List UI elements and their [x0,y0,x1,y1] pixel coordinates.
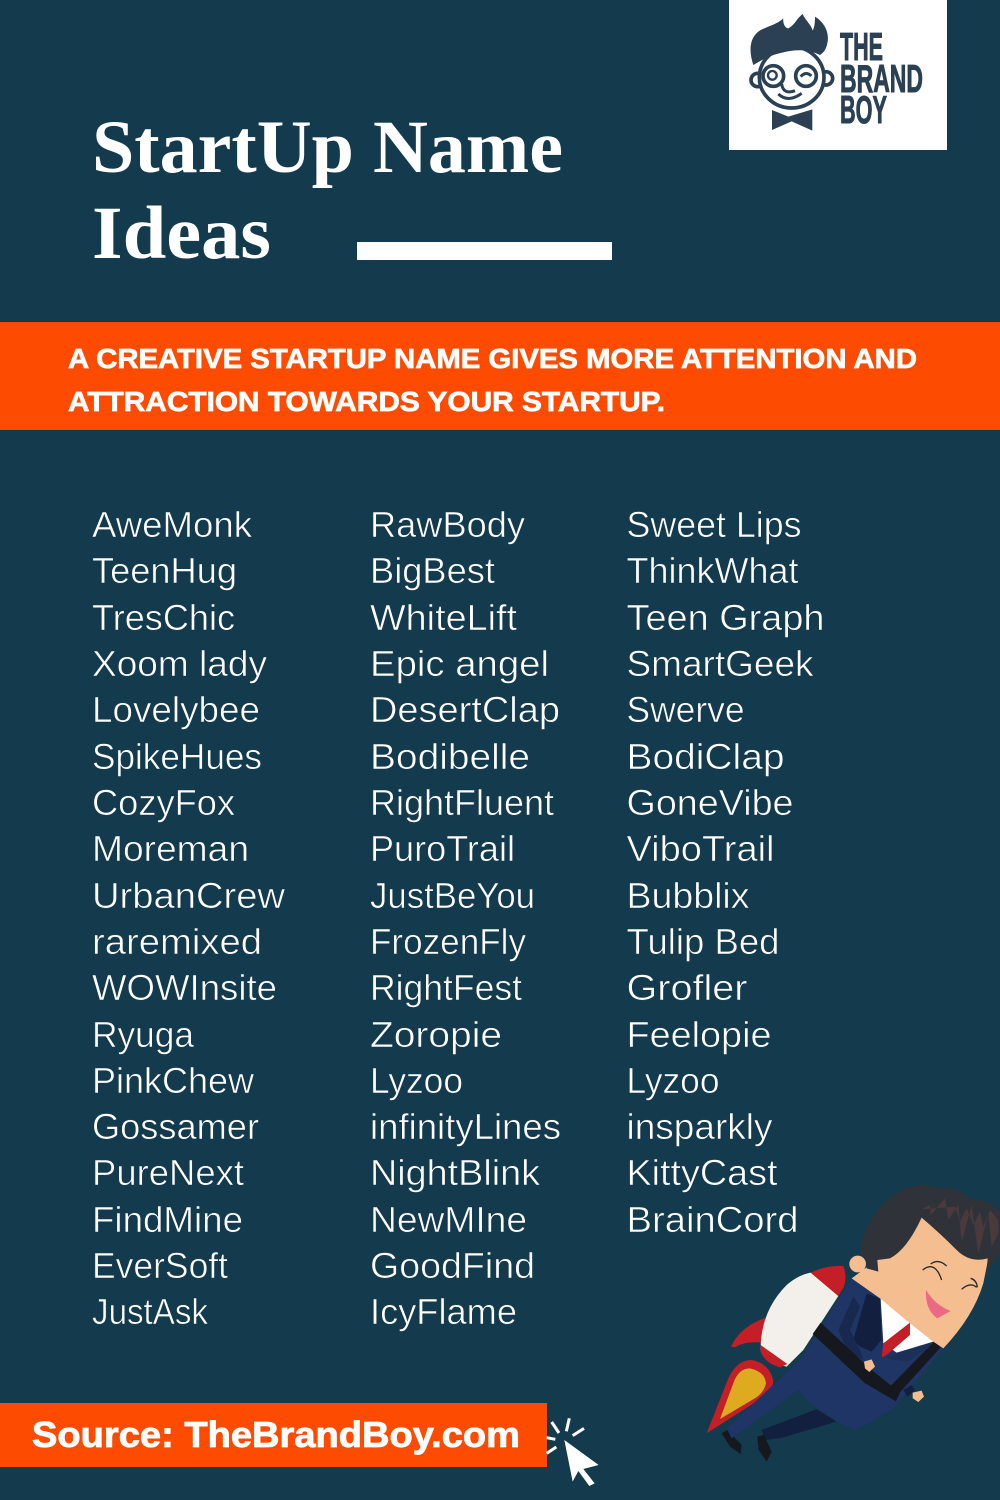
name list column 1: Ryuga [92,1014,195,1055]
name list column 2: NightBlink [370,1152,541,1193]
orange banner: ATTRACTION TOWARDS YOUR STARTUP. [68,386,665,417]
source bar [0,1403,547,1467]
name list column 3 [626,504,824,1240]
logo panel [729,0,947,150]
name list column 2: Lyzoo [370,1060,463,1101]
shirt and tie [881,1298,935,1362]
logo wordmark: BRAND [840,58,923,101]
title: Ideas [92,192,271,275]
name list column 2: DesertClap [370,689,560,730]
name list column 3: GoneVibe [626,782,794,823]
name list column 3: Feelopie [626,1014,772,1055]
name list column 2: WhiteLift [370,597,517,638]
name list column 1 [92,504,286,1332]
face: eyes and mouth [923,1262,977,1318]
name list column 3: ViboTrail [626,828,774,869]
back leg [762,1409,837,1440]
suit [727,1278,943,1438]
name list column 1: FindMine [92,1199,243,1240]
name list column 2: FrozenFly [370,921,526,962]
name list column 3: SmartGeek [626,643,815,684]
name list column 1: TeenHug [92,550,237,591]
harness strap [813,1323,941,1401]
name list column 3: Bubblix [626,875,750,916]
name list column 2: infinityLines [370,1106,561,1147]
name list column 3: ThinkWhat [626,550,798,591]
name list column 1: Lovelybee [92,689,260,730]
name list column 3: Tulip Bed [626,921,780,962]
name list column 1: Moreman [92,828,249,869]
name list column 1: TresChic [92,597,235,638]
dark lapel [853,1293,882,1352]
title [92,106,563,275]
name list column 1: UrbanCrew [92,875,286,916]
name list column 1: AweMonk [92,504,253,545]
name list column 1: SpikeHues [92,736,262,777]
name list column 2 [370,504,561,1332]
name list column 3: insparkly [626,1106,772,1147]
name list column 3: BrainCord [626,1199,798,1240]
icon: brand boy face [751,14,833,131]
source bar: Source: TheBrandBoy.com [32,1414,520,1455]
name list column 2: RawBody [370,504,525,545]
name list column 3: Grofler [626,967,748,1008]
name list column 1: WOWInsite [92,967,277,1008]
flame [707,1360,773,1433]
shoes [722,1430,772,1462]
orange banner [0,322,1000,430]
name list column 1: Xoom lady [92,643,267,684]
name list column 2: IcyFlame [370,1291,517,1332]
hands [864,1359,924,1402]
name list column 1: raremixed [92,921,262,962]
icon: click cursor [547,1418,599,1486]
name list column 2: RightFluent [370,782,554,823]
name list column 2: Zoropie [370,1014,502,1055]
logo wordmark [840,26,923,132]
orange banner: A CREATIVE STARTUP NAME GIVES MORE ATTENTION AND [68,343,917,374]
name list column 2: JustBeYou [370,875,535,916]
ear [849,1256,866,1272]
head [852,1217,988,1348]
logo wordmark: BOY [840,89,887,132]
name list column 3: KittyCast [626,1152,778,1193]
illustration: jetpack businessman [707,1185,1000,1462]
name list column 1: PureNext [92,1152,244,1193]
name list column 3: Sweet Lips [626,504,802,545]
name list column 1: Gossamer [92,1106,259,1147]
logo wordmark: THE [840,26,883,69]
rocket [731,1266,845,1367]
name list column 2: Bodibelle [370,736,530,777]
title underline bar [357,242,612,260]
title: StartUp Name [92,106,563,189]
name list column 2: BigBest [370,550,495,591]
name list column 2: GoodFind [370,1245,535,1286]
name list column 3: Teen Graph [626,597,824,638]
name list column 1: PinkChew [92,1060,255,1101]
name list column 3: Swerve [626,689,744,730]
name list column 2: NewMIne [370,1199,527,1240]
name list column 2: Epic angel [370,643,549,684]
name list column 2: PuroTrail [370,828,515,869]
name list column 2: RightFest [370,967,522,1008]
name list column 3: BodiClap [626,736,784,777]
name list column 1: CozyFox [92,782,235,823]
name list column 1: EverSoft [92,1245,228,1286]
name list column 1: JustAsk [92,1291,209,1332]
hair [860,1185,1000,1273]
name list column 3: Lyzoo [626,1060,720,1101]
